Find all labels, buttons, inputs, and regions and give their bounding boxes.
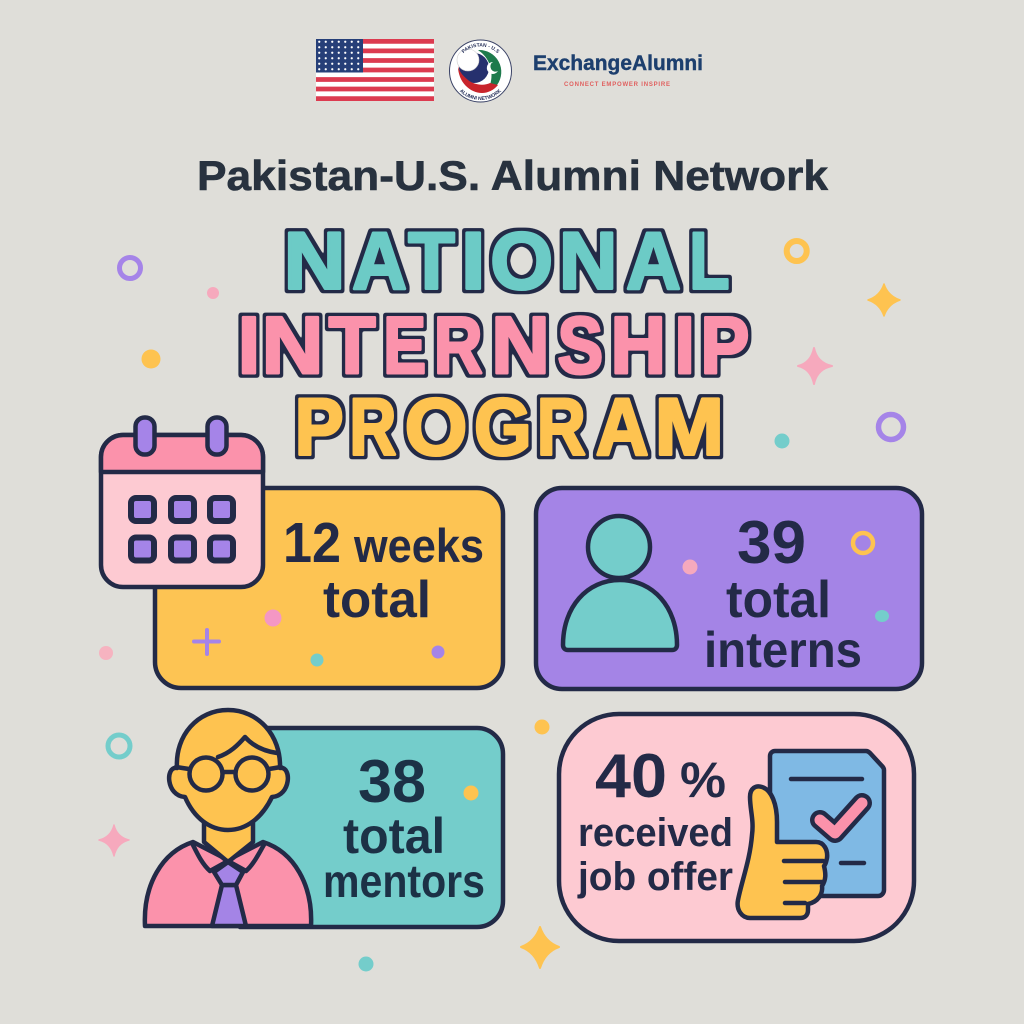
logo: ExchangeAlumni: CONNECT EMPOWER INSPIRE xyxy=(564,82,670,88)
title: National Internship Program: N xyxy=(284,216,345,306)
stat text: 38 total mentors: total xyxy=(343,808,445,864)
title: National Internship Program: L xyxy=(689,216,729,306)
stat text: 38 total mentors: 38 xyxy=(358,748,426,815)
logo: ExchangeAlumni: ExchangeAlumni xyxy=(533,52,703,75)
stat text: 38 total mentors: mentors xyxy=(323,855,485,907)
title: National Internship Program: N xyxy=(491,301,550,391)
icon: person xyxy=(563,516,677,650)
icon: mentor figure xyxy=(145,710,311,926)
stat text: 40% received job offer xyxy=(577,742,733,899)
panel: 12 weeks total xyxy=(155,488,503,688)
title: National Internship Program: S xyxy=(558,301,603,391)
stat text: 40% received job offer: received xyxy=(578,811,733,855)
logo: Pakistan-U.S. Alumni Network seal xyxy=(449,40,512,102)
title: National Internship Program: I xyxy=(461,216,485,306)
title: National Internship Program: H xyxy=(611,301,666,391)
stat text: 38 total mentors xyxy=(323,748,485,907)
title: National Internship Program: N xyxy=(559,216,617,306)
decorative confetti xyxy=(99,241,904,972)
logo: ExchangeAlumni xyxy=(533,52,703,88)
title: National Internship Program: T xyxy=(408,216,455,306)
title: National Internship Program: A xyxy=(596,382,649,472)
title: National Internship Program: M xyxy=(655,382,724,472)
title: National Internship Program: R xyxy=(434,301,483,391)
panel confetti xyxy=(464,786,478,800)
title: National Internship Program: I xyxy=(238,301,260,391)
title: National Internship Program: P xyxy=(700,301,749,391)
stat text: 39 total interns xyxy=(704,509,862,678)
stat text: 12 weeks total xyxy=(283,511,484,629)
title: National Internship Program: R xyxy=(349,382,396,472)
title: National Internship Program xyxy=(238,216,749,472)
logo: Pakistan-U.S. Alumni Network seal: ALUMNI NETWORK xyxy=(460,88,502,100)
stat text: 12 weeks total: weeks xyxy=(353,519,484,572)
title: National Internship Program: O xyxy=(405,382,467,472)
panel: 40% received job offer xyxy=(559,714,914,941)
stat text: 39 total interns: 39 xyxy=(737,509,806,576)
icon: thumbs up xyxy=(738,786,827,918)
title: National Internship Program: A xyxy=(352,216,407,306)
title: National Internship Program: R xyxy=(537,382,586,472)
icon: document with checkmark xyxy=(770,751,884,896)
title: National Internship Program: E xyxy=(383,301,426,391)
logo: Pakistan-U.S. Alumni Network seal: PAKISTAN - U.S xyxy=(462,43,500,54)
stat text: 39 total interns: total xyxy=(726,571,831,629)
heading: network name: Pakistan-U.S. Alumni Network xyxy=(197,152,829,199)
title: National Internship Program: T xyxy=(329,301,376,391)
panel confetti xyxy=(194,610,444,666)
panel: 39 total interns xyxy=(536,488,922,689)
logo: US flag xyxy=(316,39,434,101)
title: National Internship Program: N xyxy=(262,301,323,391)
icon: calendar xyxy=(101,418,263,587)
title: National Internship Program: I xyxy=(674,301,695,391)
stat text: 40% received job offer: 40 xyxy=(595,742,667,811)
stat text: 40% received job offer: % xyxy=(680,752,726,808)
title: National Internship Program: P xyxy=(295,382,344,472)
stat text: 12 weeks total: 12 xyxy=(283,511,341,575)
panel: 38 total mentors xyxy=(240,728,503,927)
stat text: 40% received job offer: job offer xyxy=(577,855,733,899)
title: National Internship Program: G xyxy=(474,382,532,472)
stat text: 12 weeks total: total xyxy=(323,571,431,629)
title: National Internship Program: A xyxy=(626,216,681,306)
panel confetti xyxy=(682,533,889,622)
stat text: 39 total interns: interns xyxy=(704,622,862,678)
title: National Internship Program: O xyxy=(490,216,553,306)
